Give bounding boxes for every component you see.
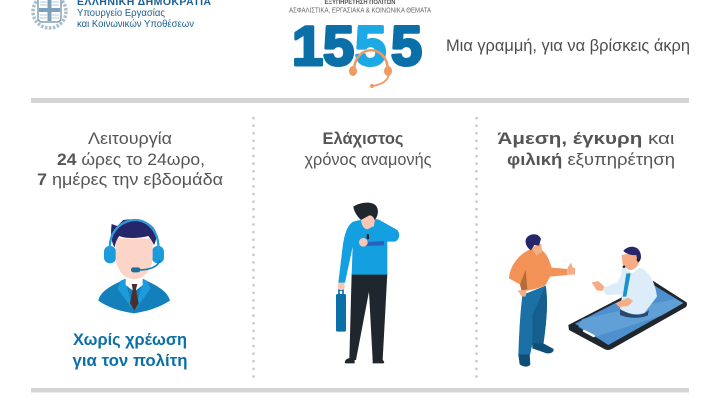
text: minimal waiting — [304, 129, 432, 169]
top divider — [31, 98, 689, 103]
callout: free of charge — [72, 330, 188, 370]
text: operating hours — [37, 129, 223, 189]
header: ministry emblem and name — [33, 0, 211, 30]
icon: man checking watch — [336, 203, 399, 363]
header: citizen service subtitle — [289, 0, 431, 14]
text: operating hours: Λειτουργία — [88, 129, 172, 148]
text: ministry line 1: Υπουργείο Εργασίας — [77, 7, 165, 19]
logo: 1555 with headset — [292, 14, 422, 88]
icon: customer and agent on smartphone — [509, 234, 687, 367]
panel: service hours — [37, 129, 223, 370]
panel: immediate and friendly service — [498, 129, 687, 367]
text: friendly service — [498, 129, 675, 169]
text: operating hours: 24 ώρες το 24ωρο, — [57, 150, 205, 169]
logo digits: 5 — [391, 14, 422, 77]
icon: call-center agent — [98, 219, 170, 313]
text: friendly service: Άμεση, έγκυρη και — [498, 129, 675, 148]
logo digits: 5 — [355, 14, 386, 77]
customer — [518, 286, 547, 355]
text: minimal waiting: χρόνος αναμονής — [304, 150, 432, 169]
text: operating hours: 7 ημέρες την εβδομάδα — [37, 170, 223, 189]
icon: Greek coat of arms — [33, 0, 66, 28]
tagline: Μια γραμμή, για να βρίσκεις άκρη — [446, 37, 690, 55]
text: topics: ΑΣΦΑΛΙΣΤΙΚΑ, ΕΡΓΑΣΙΑΚΑ & ΚΟΙΝΩΝΙΚΑ ΘΕΜΑΤΑ — [289, 8, 431, 14]
logo digits: 1 — [292, 14, 323, 77]
callout: free of charge: για τον πολίτη — [72, 351, 188, 370]
icon: orange headset — [349, 50, 392, 88]
logo digits: 5 — [323, 14, 354, 77]
text: friendly service: φιλική εξυπηρέτηση — [507, 150, 675, 169]
agent — [620, 308, 649, 318]
phone — [568, 281, 687, 350]
text: minimal waiting: Ελάχιστος — [322, 129, 404, 148]
text: ministry line 2: και Κοινωνικών Υποθέσεων — [77, 18, 194, 30]
callout: free of charge: Χωρίς χρέωση — [73, 330, 187, 349]
panel: minimal waiting time — [304, 129, 432, 363]
